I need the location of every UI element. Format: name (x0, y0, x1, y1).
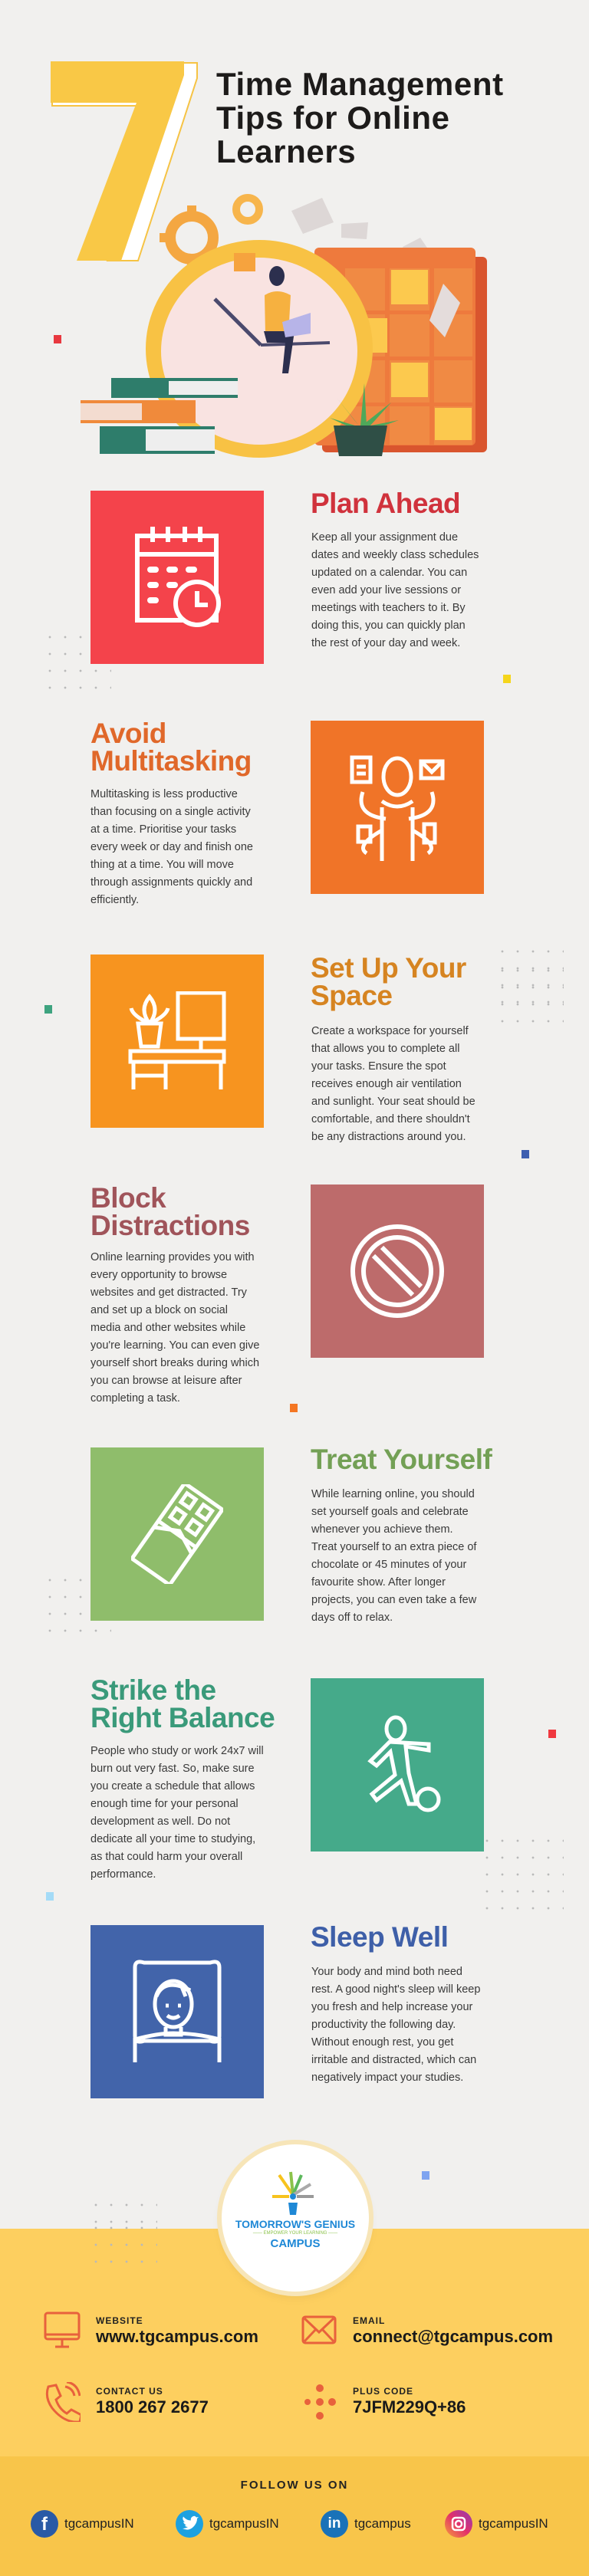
text: avoid multitasking: every week or day and finish one (90, 841, 253, 853)
text: set up your space: that allows you to complete all (311, 1043, 459, 1055)
social: facebook: tgcampusIN (64, 2516, 134, 2531)
heading: strike the right balance (90, 1674, 275, 1733)
heading: sleep well: Sleep Well (311, 1921, 448, 1953)
text: plan ahead: doing this, you can quickly plan (311, 619, 466, 632)
icon: phone (46, 2382, 81, 2422)
text: treat yourself: chocolate or 45 minutes of your (311, 1559, 466, 1571)
heading: avoid multitasking (90, 718, 252, 777)
icon: monitor (44, 2312, 80, 2348)
text: avoid multitasking: than focusing on a single activity (90, 806, 251, 818)
text: sleep well: Your body and mind both need (311, 1966, 462, 1978)
hero illustration (81, 194, 487, 458)
social: twitter (176, 2510, 279, 2538)
heading: block distractions: Distractions (90, 1210, 250, 1241)
text: plan ahead: dates and weekly class schedules (311, 549, 479, 561)
social: linkedin: tgcampus (354, 2516, 411, 2531)
text: sleep well: irritable and distracted, which can (311, 2054, 476, 2066)
heading: treat yourself: Treat Yourself (311, 1444, 492, 1475)
panel: plan ahead (90, 488, 479, 664)
text: avoid multitasking: Multitasking is less productive (90, 788, 238, 800)
text: strike the right balance: enough time for your personal (90, 1798, 239, 1810)
big number 7 (51, 61, 198, 261)
text: sleep well: negatively impact your studies. (311, 2072, 463, 2084)
icon: logo burst (272, 2171, 314, 2215)
heading: strike the right balance: Strike the (90, 1674, 216, 1706)
text: treat yourself: set yourself goals and celebrate (311, 1506, 469, 1518)
text: strike the right balance: burn out very fast. So, make sure (90, 1763, 255, 1775)
text: treat yourself (311, 1488, 477, 1624)
text: plan ahead: meetings with teachers to it. By (311, 602, 466, 614)
text: block distractions: completing a task. (90, 1392, 180, 1405)
text: treat yourself: Treat yourself to an extra piece of (311, 1541, 476, 1553)
icon: football player (311, 1678, 484, 1852)
text: plan ahead (311, 531, 479, 649)
heading: plan ahead: Plan Ahead (311, 488, 460, 519)
text: treat yourself: While learning online, you should (311, 1488, 475, 1500)
logo circle: CAMPUS (270, 2237, 321, 2250)
heading: avoid multitasking: Multitasking (90, 745, 252, 777)
text: sleep well: Without enough rest, you get (311, 2036, 453, 2049)
title: Time Management (216, 66, 504, 102)
panel: block distractions (90, 1182, 484, 1405)
icon: envelope (302, 2315, 336, 2344)
text: treat yourself: whenever you achieve them. (311, 1523, 453, 1536)
social: linkedin: in (328, 2515, 341, 2532)
social: facebook: f (41, 2514, 48, 2535)
logo text: TOMORROW'S GENIUS (235, 2218, 355, 2230)
social: facebook (31, 2510, 134, 2538)
text: block distractions: yourself short breaks during which (90, 1357, 259, 1369)
title: Learners (216, 133, 356, 169)
text: set up your space (311, 1025, 475, 1143)
panel: set up your space (90, 952, 475, 1143)
contact: plus code (304, 2384, 466, 2420)
social: twitter: tgcampusIN (209, 2516, 279, 2531)
text: avoid multitasking: thing at a time. You will move (90, 859, 234, 871)
text: strike the right balance: performance. (90, 1868, 156, 1881)
icon: desk (90, 955, 264, 1128)
icon: multitasking person (311, 721, 484, 894)
footer band (0, 2229, 589, 2456)
text: block distractions: you're learning. You can even give (90, 1339, 259, 1352)
accent square red (54, 335, 61, 343)
heading: set up your space: Set Up Your (311, 952, 466, 984)
text: avoid multitasking: at a time. Prioritise your tasks (90, 823, 236, 836)
panel: strike the right balance (90, 1674, 484, 1881)
icon: dots (304, 2384, 336, 2420)
text: plan ahead: even add your live sessions or (311, 584, 461, 596)
decorative dots (42, 629, 111, 698)
text: sleep well: you fresh and help increase your (311, 2001, 472, 2013)
icon: prohibited (311, 1184, 484, 1358)
contact: plus code: 7JFM229Q+86 (353, 2397, 466, 2417)
text: sleep well: productivity the following day. (311, 2019, 456, 2031)
panel: treat yourself (90, 1444, 492, 1624)
text: sleep well: rest. A good night's sleep will keep (311, 1983, 480, 1996)
logo circle: —— EMPOWER YOUR LEARNING —— (253, 2231, 337, 2236)
icon: calendar clock (90, 491, 264, 664)
text: set up your space: your tasks. Ensure the spot (311, 1060, 446, 1073)
heading: set up your space: Space (311, 980, 393, 1011)
text: block distractions: and set up a block on social (90, 1304, 228, 1316)
text: treat yourself: projects, you can even take a few (311, 1594, 476, 1606)
text: avoid multitasking: efficiently. (90, 894, 139, 906)
logo circle (222, 2144, 369, 2292)
text: strike the right balance: development as well. Do not (90, 1815, 230, 1828)
text: treat yourself: favourite show. After longer (311, 1576, 446, 1589)
social: instagram: tgcampusIN (479, 2516, 548, 2531)
text: block distractions: websites and get distracted. Try (90, 1286, 247, 1299)
panel: avoid multitasking (90, 718, 484, 906)
text: block distractions: Online learning provides you with (90, 1251, 255, 1263)
text: plan ahead: the rest of your day and week. (311, 637, 460, 649)
text: block distractions: media and other websites while (90, 1322, 245, 1334)
text: set up your space: be any distractions around you. (311, 1131, 466, 1143)
text: strike the right balance (90, 1745, 264, 1881)
text: strike the right balance: as that could harm your overall (90, 1851, 242, 1863)
social: linkedin (321, 2510, 411, 2538)
contact: email: connect@tgcampus.com (353, 2327, 553, 2346)
text: strike the right balance: you create a schedule that allows (90, 1780, 255, 1792)
contact: email: EMAIL (353, 2315, 385, 2326)
text: block distractions: you can browse at leisure after (90, 1375, 242, 1387)
text: strike the right balance: dedicate all your time to studying, (90, 1833, 255, 1845)
text: set up your space: comfortable, and there shouldn't (311, 1113, 470, 1125)
panel: sleep well (90, 1921, 480, 2098)
heading: block distractions: Block (90, 1182, 166, 1214)
follow us heading: FOLLOW US ON (241, 2479, 348, 2492)
contact: email (302, 2315, 553, 2346)
text: avoid multitasking: through assignments quickly and (90, 876, 252, 889)
contact: phone: 1800 267 2677 (96, 2397, 209, 2417)
text: avoid multitasking (90, 788, 253, 906)
contact: website: www.tgcampus.com (96, 2327, 258, 2346)
contact: website: WEBSITE (96, 2315, 143, 2326)
heading: set up your space (311, 952, 466, 1011)
heading: block distractions (90, 1182, 250, 1241)
text: plan ahead: Keep all your assignment due (311, 531, 458, 544)
icon: sleeping person (90, 1925, 264, 2098)
text: block distractions (90, 1251, 259, 1405)
title (216, 66, 504, 169)
contact: phone (46, 2382, 209, 2422)
text: plan ahead: updated on a calendar. You can (311, 567, 467, 579)
text: set up your space: Create a workspace for yourself (311, 1025, 469, 1037)
text: set up your space: and sunlight. Your seat should be (311, 1096, 475, 1108)
contact: plus code: PLUS CODE (353, 2386, 413, 2397)
heading: strike the right balance: Right Balance (90, 1702, 275, 1733)
text: treat yourself: days off to relax. (311, 1612, 393, 1624)
icon: chocolate bar (90, 1447, 264, 1621)
text: block distractions: every opportunity to browse (90, 1269, 227, 1281)
contact: website (44, 2312, 258, 2348)
heading: avoid multitasking: Avoid (90, 718, 166, 749)
social: instagram (445, 2510, 548, 2538)
title: Tips for Online (216, 100, 450, 136)
text: set up your space: receives enough air ventilation (311, 1078, 462, 1090)
contact: phone: CONTACT US (96, 2386, 163, 2397)
text: sleep well (311, 1966, 480, 2084)
text: strike the right balance: People who study or work 24x7 will (90, 1745, 264, 1757)
